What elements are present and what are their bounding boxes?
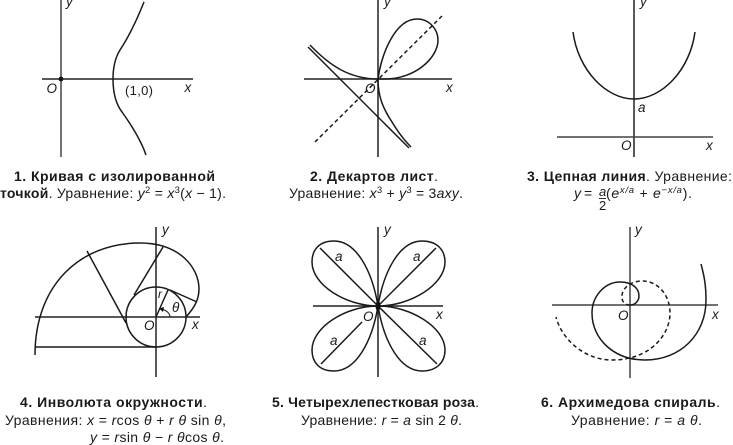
curve 1 [113,2,146,155]
caption 2: = 3 [412,185,437,201]
axis labels 5: a [330,333,338,348]
chart axes 2 [304,0,452,157]
caption 2: axy. [437,185,463,201]
isolated point [59,77,63,81]
caption 1: 1. Кривая с изолированной [14,168,215,184]
caption 2: 3 [406,185,412,196]
caption 2 [289,168,463,201]
axis labels 6: O [618,308,629,323]
axis labels 2 [365,0,454,96]
dashed spiral [556,281,670,360]
caption 3: ). [683,185,692,201]
caption 3: a [599,184,606,199]
chart axes 6 [552,227,718,378]
axis labels 3: x [705,138,714,153]
axis labels 4: y [161,222,170,237]
caption 1 [0,168,226,201]
involute curve [35,243,199,355]
axis labels 5: a [413,249,421,264]
axis labels 5: a [335,249,343,264]
chart axes 1 [42,0,193,157]
axis labels 6: x [711,307,720,322]
caption 5 [272,394,479,428]
caption 1: = [151,185,167,201]
angle arc with arrow [159,307,170,317]
caption 3: 2 [599,198,606,213]
axis labels 1: O [46,81,58,96]
caption 1: точкой. Уравнение: y [0,185,145,201]
petal lower right [378,306,445,371]
petal diagonals [320,248,437,364]
caption 2: y [398,185,407,201]
caption 1: ( [180,185,185,201]
solid spiral [592,264,706,360]
caption 4 [5,394,226,445]
axis labels 4: x [191,317,200,332]
caption 6 [541,394,720,428]
radius line [156,290,168,317]
axis labels 3: a [638,100,646,115]
caption 4: y = rsin θ − r θcos θ. [89,429,224,445]
petal upper left [312,241,378,306]
caption 5: Уравнение: r = a sin 2 θ. [301,412,462,428]
caption 1: 2 [145,185,150,196]
panel: involute of a circle [5,222,226,445]
caption 2: 3 [377,185,382,196]
axis labels 3 [621,0,714,153]
axis labels 6: y [634,222,643,237]
axis labels 4: O [144,318,155,333]
centre blob [376,301,380,311]
caption 2: 2. Декартов лист. [310,168,438,184]
panel: curve with isolated point [0,0,226,201]
caption 2: + [382,185,399,201]
axis labels 3: O [621,138,632,153]
caption 3: e [653,185,661,201]
petal lower left [312,306,378,371]
caption 1: x − 1). [185,185,226,201]
chart axes 3 [557,0,713,157]
tangent segments [35,247,197,347]
caption 1: x [166,185,175,201]
base circle [126,287,186,347]
caption 3: 3. Цепная линия. Уравнение: [527,168,732,184]
catenary curve [573,32,695,99]
caption 3: (e [606,185,619,201]
caption 3: y [573,185,582,201]
axis labels 1: (1,0) [125,83,153,98]
caption 3: −x/a [662,185,682,196]
caption 3: + [635,185,652,201]
panel: four-petal rose [272,222,479,428]
axis labels 5: y [383,222,392,237]
caption 5: 5. Четырехлепестковая роза. [272,394,479,410]
asymptote [308,47,409,148]
axis labels 5: O [363,309,374,324]
caption 3: = [584,185,592,201]
axis labels 4: r [158,287,163,301]
caption 1: 3 [175,185,180,196]
axis labels 4 [144,222,200,333]
caption 4: Уравнения: x = rcos θ + r θ sin θ, [5,412,226,428]
panel: folium of Descartes [289,0,463,201]
chart axes 5 [313,227,443,377]
panel: Archimedean spiral [541,222,720,428]
panel: catenary [527,0,732,213]
folium loop [378,19,438,79]
axis labels 1 [46,0,192,98]
caption 3 [527,168,732,213]
chart axes 4 [35,227,200,377]
axis labels 6 [618,222,720,323]
axis labels 5 [330,222,444,348]
caption 3: x/a [619,185,634,196]
caption 4: 4. Инволюта окружности. [20,394,207,410]
caption 2: Уравнение: x [289,185,377,201]
axis labels 5: x [435,307,444,322]
axis labels 2: x [445,80,454,95]
caption 6: Уравнение: r = a θ. [571,412,702,428]
petal upper right [378,241,445,306]
axis labels 4: θ [172,300,180,315]
axis labels 1: x [184,80,192,95]
axis labels 2: O [365,81,376,96]
folium branches [310,45,411,147]
axis labels 5: a [419,333,427,348]
dashed symmetry line [315,16,442,142]
caption 6: 6. Архимедова спираль. [541,394,720,410]
